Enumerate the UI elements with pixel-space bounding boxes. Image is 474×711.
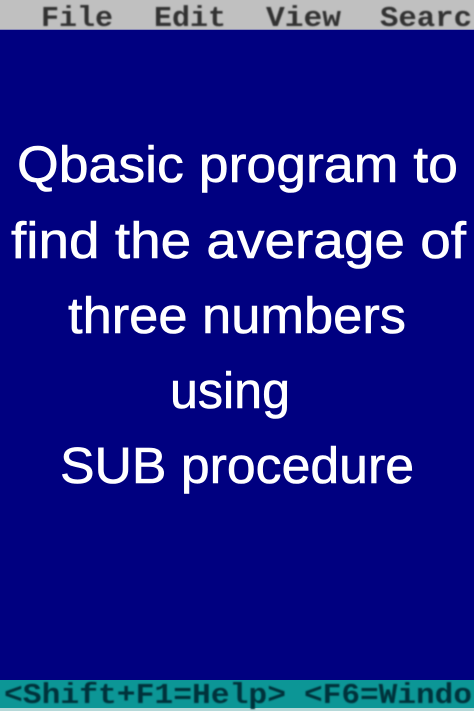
menu bar [0,0,474,35]
menu bar: Searc [380,2,472,35]
menu bar: File [41,2,113,35]
title: find the average of [11,212,467,269]
menu bar: View [266,2,342,35]
title: Qbasic program to [17,136,458,193]
title: using [170,362,290,419]
status bar [0,679,474,711]
title: SUB procedure [60,437,414,494]
title [11,136,467,494]
title: three numbers [68,287,406,344]
menu bar: Edit [154,2,226,35]
